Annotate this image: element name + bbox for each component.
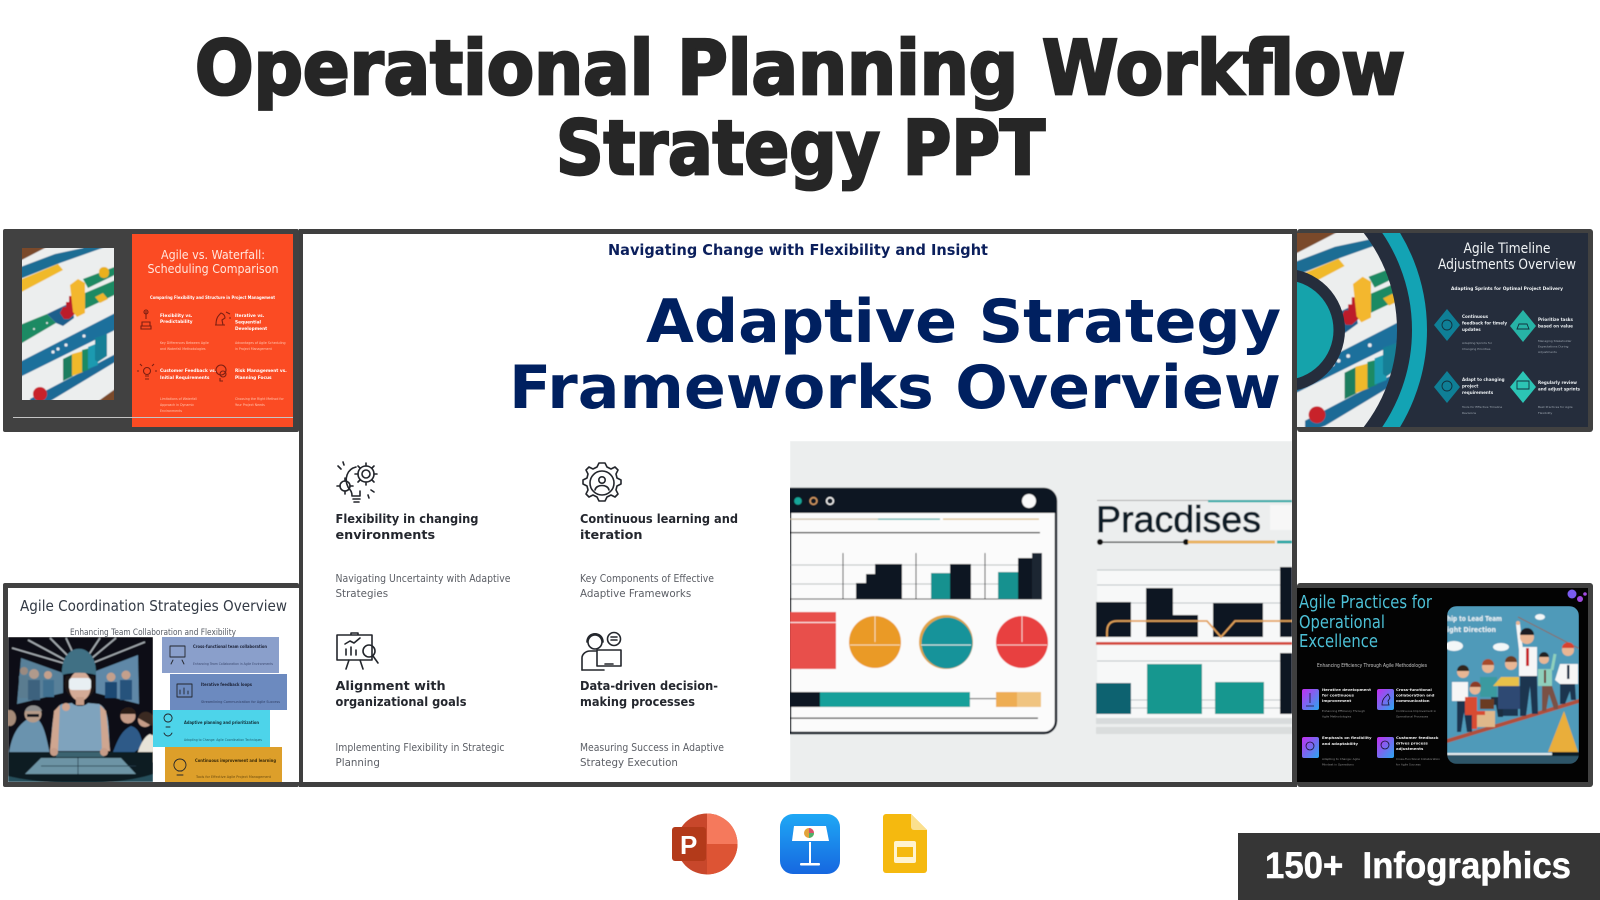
orange slide: Sequential <box>235 320 262 326</box>
diamonds and labels: Adapting Sprints for <box>1462 341 1493 345</box>
feature icons and labels: drives process <box>1396 740 1429 746</box>
slide headline <box>509 287 1281 423</box>
decorative purple dots <box>1568 590 1587 602</box>
orange slide: Initial Requirements <box>160 375 210 381</box>
thumbnail heading: Operational <box>1299 613 1385 633</box>
feature: data-driven decision-making processes: Data-driven decision- <box>580 679 718 694</box>
feature icons and labels: and adaptability <box>1322 741 1358 746</box>
orange slide: Predictability <box>160 319 193 325</box>
orange slide: Key Differences Between Agile <box>160 341 209 345</box>
panel: bottom-left thumbnail, Agile Coordination <box>3 583 299 787</box>
diamonds and labels: project <box>1462 384 1478 388</box>
orange slide: and Waterfall Methodologies <box>160 347 206 351</box>
panel: main slide frame <box>299 229 1297 787</box>
diamonds and labels: updates <box>1462 327 1481 332</box>
diamonds and labels: Revisions <box>1462 411 1477 415</box>
thumbnail image: 3D chart <box>22 248 114 400</box>
diamonds and labels: Regularly review <box>1538 380 1577 385</box>
feature icons and labels: Adapting to Change: Agile <box>1322 757 1360 761</box>
panel: bottom-right thumbnail, Agile Practices <box>1297 583 1593 787</box>
blue man <box>1491 697 1503 717</box>
page title: Operational Planning Workflow <box>195 24 1405 112</box>
thumbnail heading: Adjustments Overview <box>1438 257 1576 273</box>
feature icons and labels: for continuous <box>1322 692 1355 698</box>
thumbnail heading: Adapting Sprints for Optimal Project Delivery <box>1451 286 1563 292</box>
orange slide: Flexibility vs. <box>160 313 193 319</box>
orange slide: Development <box>235 326 267 332</box>
diamonds and labels: Adjustments <box>1538 350 1557 354</box>
feature: flexibility in changing environments: Flexibility in changing <box>336 512 478 527</box>
orange slide: Comparing Flexibility and Structure in Project Management <box>150 295 275 301</box>
thumbnail heading: Agile Coordination Strategies Overview <box>20 597 287 615</box>
thumbnail heading: Excellence <box>1299 632 1378 652</box>
icon: Google Slides <box>883 814 927 873</box>
card: iterative feedback loops <box>170 674 287 710</box>
feature: flexibility in changing environments: Strategies <box>336 588 388 600</box>
page title: Strategy PPT <box>556 104 1045 192</box>
thumbnail heading: Agile Timeline <box>1464 241 1550 257</box>
holographic panels <box>17 658 63 704</box>
thumbnail heading: Enhancing Team Collaboration and Flexibility <box>70 628 236 638</box>
thumbnail heading <box>1299 593 1433 669</box>
feature: data-driven decision-making processes: Strategy Execution <box>580 757 678 769</box>
feature icons and labels: Iterative development <box>1322 687 1371 692</box>
badge: 150+ Infographics: 150+ Infographics <box>1265 845 1571 886</box>
diamonds and labels: based on value <box>1538 324 1573 328</box>
feature: continuous learning and iteration: iteration <box>580 528 643 543</box>
feature: continuous learning and iteration: Adaptive Frameworks <box>580 588 691 600</box>
people <box>1452 621 1578 732</box>
thumbnail heading <box>20 597 287 638</box>
tall man <box>1520 676 1538 716</box>
icon: gear lightbulb <box>337 462 377 502</box>
thumbnail heading: Enhancing Efficiency Through Agile Methodologies <box>1317 663 1427 669</box>
orange slide: Planning Focus <box>235 375 272 381</box>
card: adaptive planning and prioritization: Adapting to Change: Agile Coordination Techniques <box>184 738 262 742</box>
box, briefcase, seated woman <box>1477 711 1495 727</box>
illustration: dashboard practices image <box>790 441 1292 782</box>
feature: flexibility in changing environments <box>336 462 510 600</box>
icon: PowerPoint: P <box>680 830 697 860</box>
photo: team around holographic table <box>4 637 154 783</box>
mock chart text: Pracdises <box>1096 499 1261 540</box>
feature: data-driven decision-making processes: making processes <box>580 695 695 710</box>
feature icons and labels: Mindset in Operations <box>1322 762 1354 766</box>
feature icons and labels: Emphasis on flexibility <box>1322 735 1372 740</box>
feature icons and labels: Cross-functional <box>1396 687 1432 692</box>
illustration: team on a rising slope: ight Direction <box>1447 626 1496 634</box>
icon: presentation board with magnifier <box>337 633 378 669</box>
feature: alignment with organizational goals: organizational goals <box>336 695 467 710</box>
diamonds and labels: Tools for Effective Timeline <box>1461 405 1502 409</box>
orange slide: Advantages of Agile Scheduling <box>235 341 286 345</box>
orange slide: in Project Management <box>235 347 273 351</box>
left man <box>8 719 50 753</box>
feature: alignment with organizational goals <box>336 633 505 769</box>
feature: flexibility in changing environments: Navigating Uncertainty with Adaptive <box>336 573 510 585</box>
orange slide: Agile vs. Waterfall: <box>161 247 265 262</box>
feature icons and labels: improvement <box>1322 698 1351 703</box>
diamonds and labels: Continuous <box>1462 314 1489 319</box>
dashboard window <box>790 489 1056 733</box>
feature icons and labels: Operational Processes <box>1396 714 1429 718</box>
diamonds and labels: Changing Priorities <box>1462 347 1491 351</box>
feature: data-driven decision-making processes <box>580 632 724 769</box>
feature icons and labels <box>1302 687 1440 766</box>
diamonds and labels: and adjust sprints <box>1538 386 1581 392</box>
badge: 150+ Infographics <box>1238 833 1600 900</box>
orange slide: Customer Feedback vs. <box>160 368 217 374</box>
orange slide: Risk Management vs. <box>235 368 287 374</box>
orange slide: Limitations of Waterfall <box>160 397 197 401</box>
illustration: team on a rising slope: hip to Lead Team <box>1447 615 1502 623</box>
icon: gear with person <box>583 463 621 501</box>
right bar charts <box>1096 567 1292 734</box>
diamonds and labels: feedback for timely <box>1462 320 1507 326</box>
thumbnail heading <box>1438 241 1576 292</box>
panel: top-right thumbnail, Agile Timeline <box>1297 229 1593 432</box>
icon: Keynote <box>780 814 840 874</box>
feature icons and labels: Customer feedback <box>1396 735 1439 740</box>
orange slide: Choosing the Right Method for <box>235 397 284 401</box>
woman <box>64 676 96 698</box>
card: iterative feedback loops: Streamlining Communication for Agile Success <box>201 700 280 704</box>
diamonds and labels: Adapt to changing <box>1462 377 1505 382</box>
orange slide <box>132 234 293 427</box>
feature: alignment with organizational goals: Planning <box>336 757 380 769</box>
slide headline: Frameworks Overview <box>509 353 1281 423</box>
panel: top-left thumbnail, Agile vs Waterfall <box>3 229 299 432</box>
icon: person at terminal <box>582 632 621 670</box>
card: continuous improvement and learning: Continuous improvement and learning <box>195 758 276 763</box>
feature: continuous learning and iteration: Continuous learning and <box>580 512 738 527</box>
diamonds and labels: Expectations During <box>1538 344 1569 348</box>
card: continuous improvement and learning: Tools for Effective Agile Project Management <box>195 775 272 779</box>
card: adaptive planning and prioritization <box>153 710 270 747</box>
diamonds and labels: Flexibility <box>1538 411 1553 415</box>
illustration: team on a rising slope <box>1445 606 1580 764</box>
feature icons and labels: Cross-Functional Collaboration <box>1396 757 1440 761</box>
feature: alignment with organizational goals: Alignment with <box>336 679 446 694</box>
thumbnail image with concentric rings <box>1297 233 1427 427</box>
orange slide: Iterative vs. <box>235 313 265 319</box>
orange slide: Approach in Dynamic <box>160 403 194 407</box>
card: cross-functional team collaboration <box>162 637 279 673</box>
icons: orange slide <box>137 310 231 381</box>
card: adaptive planning and prioritization: Adaptive planning and prioritization <box>184 720 259 725</box>
diamonds and labels: Prioritize tasks <box>1538 317 1573 322</box>
feature: data-driven decision-making processes: Measuring Success in Adaptive <box>580 742 724 754</box>
white-shirt woman <box>1457 701 1472 732</box>
card: cross-functional team collaboration: Enhancing Team Collaboration in Agile Environments <box>193 662 273 666</box>
feature icons and labels: adjustments <box>1396 746 1424 751</box>
right women <box>113 726 143 756</box>
teal man <box>1542 686 1558 711</box>
feature: continuous learning and iteration: Key Components of Effective <box>580 573 714 585</box>
icon: PowerPoint <box>672 814 738 874</box>
orange slide: Environments <box>160 409 182 413</box>
red-haired man <box>1560 684 1576 704</box>
card: continuous improvement and learning <box>165 747 282 782</box>
table <box>8 752 153 782</box>
page title <box>195 24 1405 192</box>
feature icons and labels: for Agile Success <box>1396 762 1421 766</box>
card: iterative feedback loops: Iterative feedback loops <box>201 682 253 687</box>
yellow-shirt man <box>1503 706 1518 716</box>
diamonds and labels: requirements <box>1462 390 1494 395</box>
slide subtitle: Navigating Change with Flexibility and Insight <box>608 241 988 259</box>
card: cross-functional team collaboration: Cross-functional team collaboration <box>193 644 267 649</box>
feature: continuous learning and iteration <box>580 463 738 600</box>
slide headline: Adaptive Strategy <box>646 287 1281 357</box>
feature icons and labels: Continuous Improvement in <box>1396 709 1436 713</box>
thumbnail heading: Agile Practices for <box>1299 593 1433 613</box>
feature: flexibility in changing environments: environments <box>336 528 435 543</box>
feature icons and labels: collaboration and <box>1396 692 1435 698</box>
feature icons and labels: Enhancing Efficiency Through <box>1322 709 1365 713</box>
feature icons and labels: Agile Methodologies <box>1322 714 1352 718</box>
orange slide: Your Project Needs <box>235 403 265 407</box>
diamonds and labels: Best Practices for Agile <box>1538 405 1573 409</box>
diamonds and labels <box>1434 309 1581 415</box>
divider line <box>13 417 293 418</box>
feature: alignment with organizational goals: Implementing Flexibility in Strategic <box>336 742 505 754</box>
feature icons and labels: communication <box>1396 698 1430 703</box>
orange slide: Scheduling Comparison <box>148 261 278 276</box>
diamonds and labels: Managing Stakeholder <box>1538 339 1572 343</box>
